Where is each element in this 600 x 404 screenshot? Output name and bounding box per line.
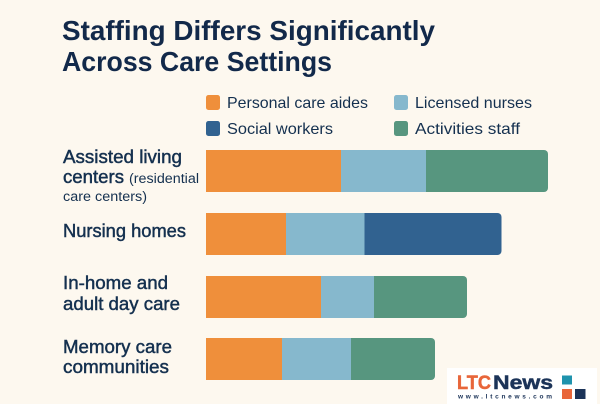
row label: in-home: In-home and xyxy=(63,273,168,293)
logo: LTC News: www.ltcnews.com xyxy=(457,394,552,400)
row label: memory care: communities xyxy=(63,357,169,377)
legend xyxy=(206,95,532,138)
legend: Licensed nurses xyxy=(415,95,532,112)
row label: assisted living: Assisted living xyxy=(63,147,182,167)
row label: assisted living: care centers) xyxy=(63,189,147,204)
row label: nursing homes: Nursing homes xyxy=(63,221,186,241)
legend: Activities staff xyxy=(415,121,521,138)
row label: in-home: adult day care xyxy=(63,294,180,314)
logo: LTC News xyxy=(447,368,597,404)
bar: memory care xyxy=(206,338,435,380)
row label: assisted living xyxy=(63,147,199,204)
bar: in-home xyxy=(206,276,467,318)
logo: LTC News: News xyxy=(493,372,553,394)
bar: nursing homes xyxy=(206,213,502,255)
legend: Personal care aides xyxy=(227,95,368,112)
title: Staffing Differs Significantly xyxy=(62,15,435,46)
row label: memory care xyxy=(63,337,172,377)
row label: assisted living: (residential xyxy=(129,171,199,186)
title xyxy=(62,15,435,77)
bar: assisted living xyxy=(206,150,548,192)
legend: Social workers xyxy=(227,121,333,138)
row label: assisted living: centers xyxy=(63,167,124,187)
row label: memory care: Memory care xyxy=(63,337,172,357)
title: Across Care Settings xyxy=(62,46,332,77)
logo: LTC News: LTC xyxy=(457,372,491,394)
row label: in-home xyxy=(63,273,180,314)
